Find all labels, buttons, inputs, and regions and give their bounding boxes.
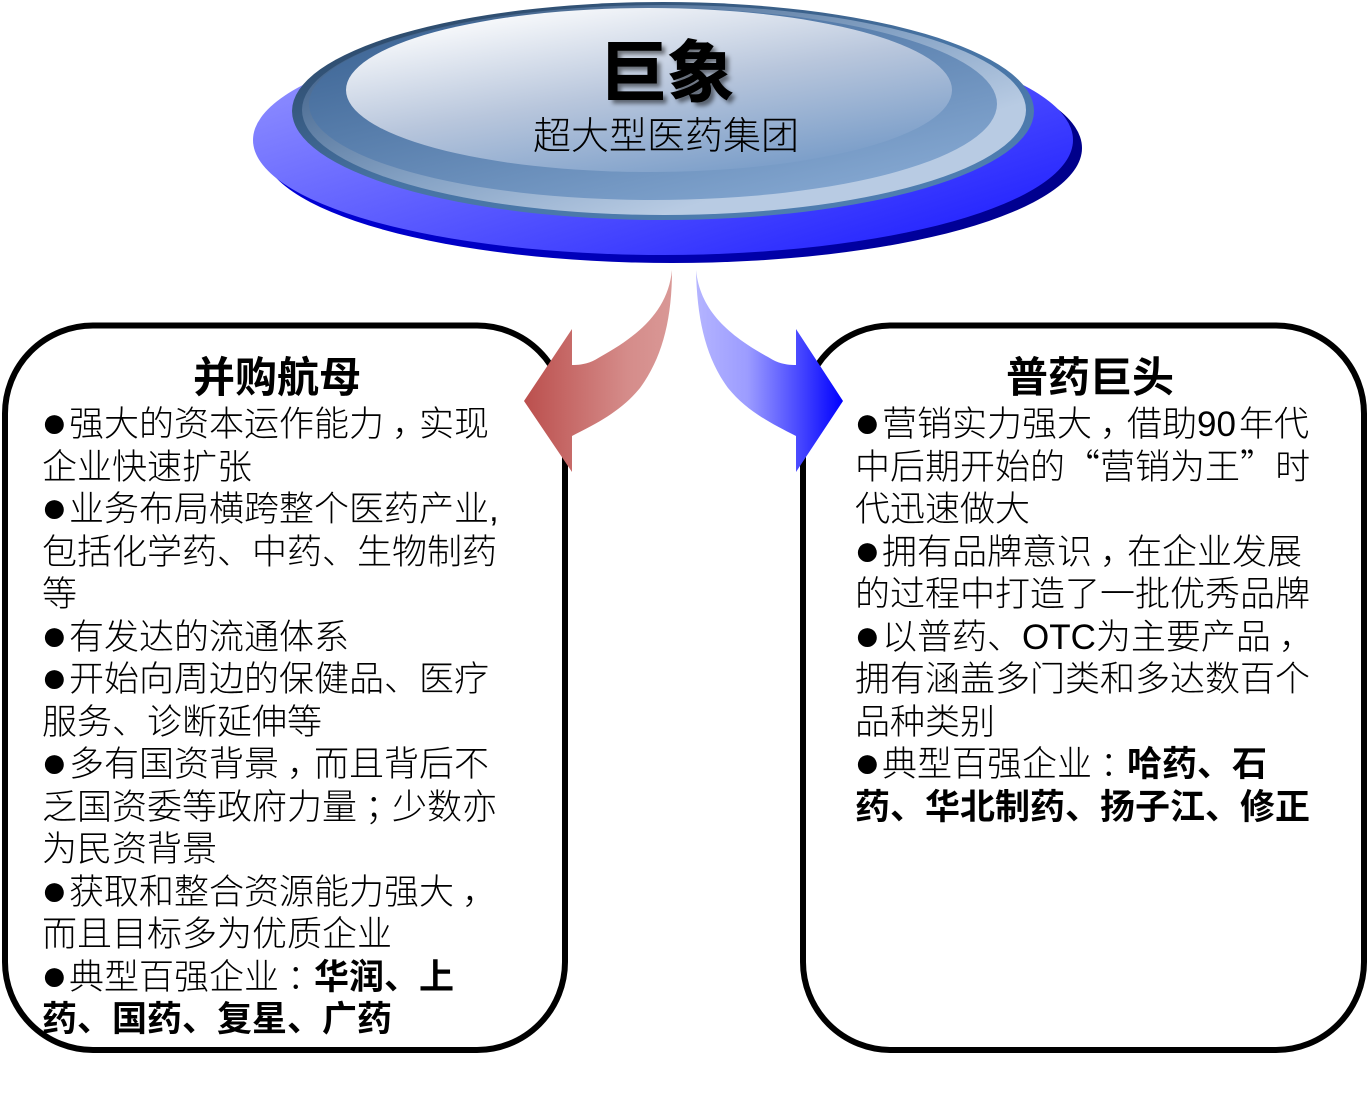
text block: left panel: ● [41, 737, 68, 788]
text block: right panel: ● [854, 737, 881, 788]
text block: right panel: 拥有品牌意识，在企业发展 [882, 532, 1302, 572]
text block: right panel [854, 397, 1314, 826]
text block: right panel: 中后期开始的“营销为王”时 [855, 438, 1310, 490]
text block: left panel: ● [41, 950, 68, 1000]
text block: left panel [41, 397, 499, 1039]
text block: right panel: 典型百强企业：哈药、石 [882, 745, 1267, 784]
text block: left panel: 服务、诊断延伸等 [42, 702, 322, 742]
text block: left panel: 乏国资委等政府力量；少数亦 [42, 788, 497, 826]
text block: left panel: ● [41, 864, 68, 916]
text block: left panel: 强大的资本运作能力，实现 [69, 405, 489, 444]
panel: right box outline [803, 326, 1364, 1050]
text block: left panel: ● [41, 397, 68, 448]
text block: left panel: 开始向周边的保健品、医疗 [69, 660, 489, 699]
text block: left panel: ● [41, 610, 68, 660]
heading: left panel: 并购航母 [193, 354, 361, 401]
panel: left box outline [5, 326, 565, 1050]
text block: right panel: 以普药、OTC为主要产品， [882, 618, 1314, 656]
arrow: right blue [696, 270, 843, 472]
text block: right panel: 代迅速做大 [855, 490, 1030, 529]
text block: left panel: 业务布局横跨整个医药产业, [69, 490, 499, 529]
text block: right panel: 的过程中打造了一批优秀品牌 [855, 575, 1310, 614]
text block: left panel: ● [41, 652, 68, 703]
text block: right panel: 拥有涵盖多门类和多达数百个 [855, 660, 1310, 699]
text block: left panel: ● [41, 482, 68, 533]
title: 巨象: 巨象 [600, 36, 734, 111]
text block: left panel: 企业快速扩张 [42, 448, 252, 486]
text block: right panel: 品种类别 [855, 702, 995, 742]
text block: left panel: 多有国资背景，而且背后不 [69, 745, 489, 784]
text block: right panel: ● [854, 524, 881, 576]
text block: left panel: 等 [42, 575, 77, 614]
text block: right panel: 营销实力强大，借助90年代 [882, 405, 1309, 444]
heading: right panel: 普药巨头 [1006, 354, 1174, 401]
text block: left panel: 典型百强企业：华润、上 [69, 958, 454, 996]
platform: steel ellipse [292, 2, 1034, 220]
text block: left panel: 有发达的流通体系 [69, 618, 349, 656]
text block: right panel: ● [854, 397, 881, 448]
platform: blue disc [253, 25, 1082, 263]
text block: left panel: 而且目标多为优质企业 [42, 915, 392, 954]
arrow: left red [524, 270, 672, 472]
text block: left panel: 药、国药、复星、广药 [42, 1000, 392, 1039]
text block: left panel: 获取和整合资源能力强大， [69, 872, 497, 912]
text block: right panel: 药、华北制药、扬子江、修正 [855, 788, 1310, 826]
text block: left panel: 为民资背景 [42, 830, 217, 869]
text block: right panel: ● [854, 610, 881, 660]
subtitle: 超大型医药集团 [533, 116, 799, 158]
text block: left panel: 包括化学药、中药、生物制药 [42, 532, 497, 572]
